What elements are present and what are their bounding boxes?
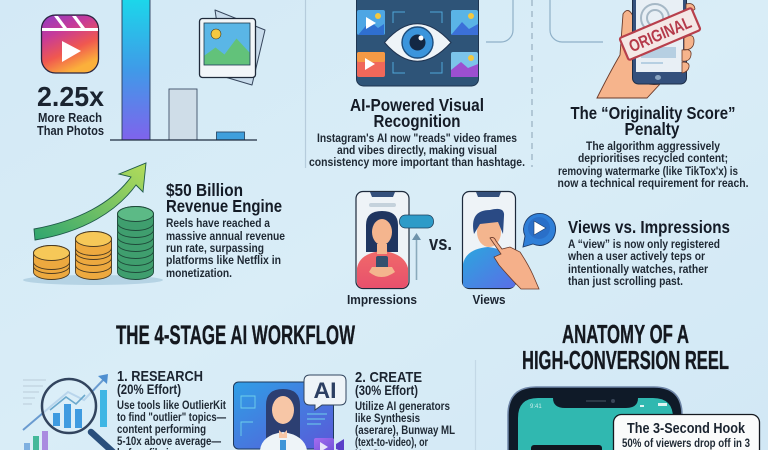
text: step 1 research: 1. RESEARCH xyxy=(117,368,203,385)
icon: views phone xyxy=(462,192,516,288)
text: more reach than photos xyxy=(37,111,104,138)
icon: research magnifier xyxy=(23,374,113,450)
text: step 2 create: 2. CREATE xyxy=(355,369,422,386)
text: views body: A “view” is now only registered xyxy=(568,238,720,251)
text: visual recognition body: and vibes directly, making visual xyxy=(337,144,497,157)
heading: AI-powered visual recognition: AI-Powered Visual xyxy=(350,95,484,115)
icon: coin stacks xyxy=(23,206,163,285)
text: step 2 create: (30% Effort) xyxy=(355,383,418,398)
heading: AI-powered visual recognition xyxy=(350,95,484,131)
heading: $50 billion revenue engine xyxy=(166,180,282,216)
text: step 2 create: (text-to-video), or xyxy=(355,436,428,449)
text: views body: than just scrolling past. xyxy=(568,275,683,288)
text: originality body: The algorithm aggressively xyxy=(586,140,720,153)
text: visual recognition body xyxy=(309,132,525,169)
text: step 2 create xyxy=(355,369,455,450)
text: revenue body: massive annual revenue xyxy=(166,230,285,243)
heading: views vs impressions: Views vs. Impressions xyxy=(568,217,730,237)
text: revenue body: Reels have reached a xyxy=(166,217,270,230)
text: views body: when a user actively teps or xyxy=(567,250,705,263)
text: visual recognition body: consistency more important than hashtage. xyxy=(309,156,525,169)
icon: growth arrow xyxy=(34,163,146,240)
icon: hand holding phone with ORIGINAL stamp: ORIGINAL xyxy=(626,13,694,56)
heading: anatomy of a high-conversion reel: ANATOMY OF A xyxy=(562,319,689,349)
stat: 2.25x: 2.25x xyxy=(37,81,104,112)
panel: 4-stage AI workflow xyxy=(23,320,455,450)
text: views body: intentionally watches, rather xyxy=(568,263,708,276)
panel: revenue engine xyxy=(23,163,285,285)
icon: AI eye screen xyxy=(356,0,478,86)
text: visual recognition body: Instagram's AI now "reads" video frames xyxy=(317,132,517,145)
text: step 2 create: Utilize AI generators xyxy=(355,400,450,413)
text: step 2 create: (aserare), Bunway ML xyxy=(355,424,455,437)
text: revenue body: run rate, surpassing xyxy=(166,242,264,255)
icon: reels logo xyxy=(42,15,98,73)
callout: the 3-second hook: The 3-Second Hook xyxy=(627,420,746,437)
text: more reach than photos: Than Photos xyxy=(37,124,104,138)
text: step 1 research xyxy=(117,368,226,450)
heading: the 4-stage AI workflow: THE 4-STAGE AI WORKFLOW xyxy=(116,320,355,350)
text: step 1 research: (20% Effort) xyxy=(117,382,181,397)
panel: originality score penalty xyxy=(558,0,748,190)
icon: photos xyxy=(200,10,265,85)
panel: anatomy of a high-conversion reel xyxy=(508,319,760,450)
heading: anatomy of a high-conversion reel xyxy=(522,319,729,375)
panel: AI-powered visual recognition xyxy=(309,0,525,169)
text: revenue body: platforms like Netflix in xyxy=(166,254,281,267)
bar chart xyxy=(110,0,257,140)
text: step 1 research: content performing xyxy=(117,423,206,436)
text: step 2 create: like Synthesis xyxy=(355,412,420,425)
text: vs: vs. xyxy=(429,233,452,255)
label: views: Views xyxy=(472,292,506,307)
text: step 1 research: 5-10x above average— xyxy=(117,435,221,448)
icon: hand holding phone with ORIGINAL stamp xyxy=(597,0,701,98)
icon: play bubble xyxy=(523,213,556,247)
heading: $50 billion revenue engine: Revenue Engine xyxy=(166,196,282,216)
icon: impressions phone xyxy=(356,192,409,288)
text: views body xyxy=(567,238,720,288)
heading: the originality score penalty: The “Originality Score” xyxy=(570,103,736,123)
heading: the originality score penalty xyxy=(570,103,736,139)
panel: reach comparison xyxy=(37,0,265,140)
text: originality body: now a technical requirement for reach. xyxy=(558,177,748,190)
panel: views vs impressions xyxy=(347,192,730,307)
text: originality body xyxy=(558,140,748,190)
icon: pointing hand xyxy=(490,237,539,289)
text: step 1 research: Use tools like OutlierKit xyxy=(117,399,226,412)
label: impressions: Impressions xyxy=(347,292,417,307)
icon: phone with teal screen xyxy=(508,387,682,450)
heading: the originality score penalty: Penalty xyxy=(624,119,680,139)
text: originality body: removing watermarke (like TikTox'x) is xyxy=(558,165,738,178)
text: revenue body: monetization. xyxy=(166,267,232,280)
text: more reach than photos: More Reach xyxy=(38,111,102,125)
text: originality body: deprioritises recycled content; xyxy=(578,152,728,165)
icon: AI avatar panel xyxy=(234,375,346,450)
icon: AI avatar panel: AI xyxy=(314,378,336,403)
text: step 1 research: to find "outlier" topics— xyxy=(117,411,226,424)
callout: the 3-second hook xyxy=(614,414,760,450)
heading: AI-powered visual recognition: Recognition xyxy=(374,111,460,131)
icon: chat bubble and up arrow xyxy=(400,215,434,280)
icon: phone with teal screen: 9:41 xyxy=(530,404,542,410)
text: revenue body xyxy=(166,217,285,280)
heading: $50 billion revenue engine: $50 Billion xyxy=(166,180,243,200)
